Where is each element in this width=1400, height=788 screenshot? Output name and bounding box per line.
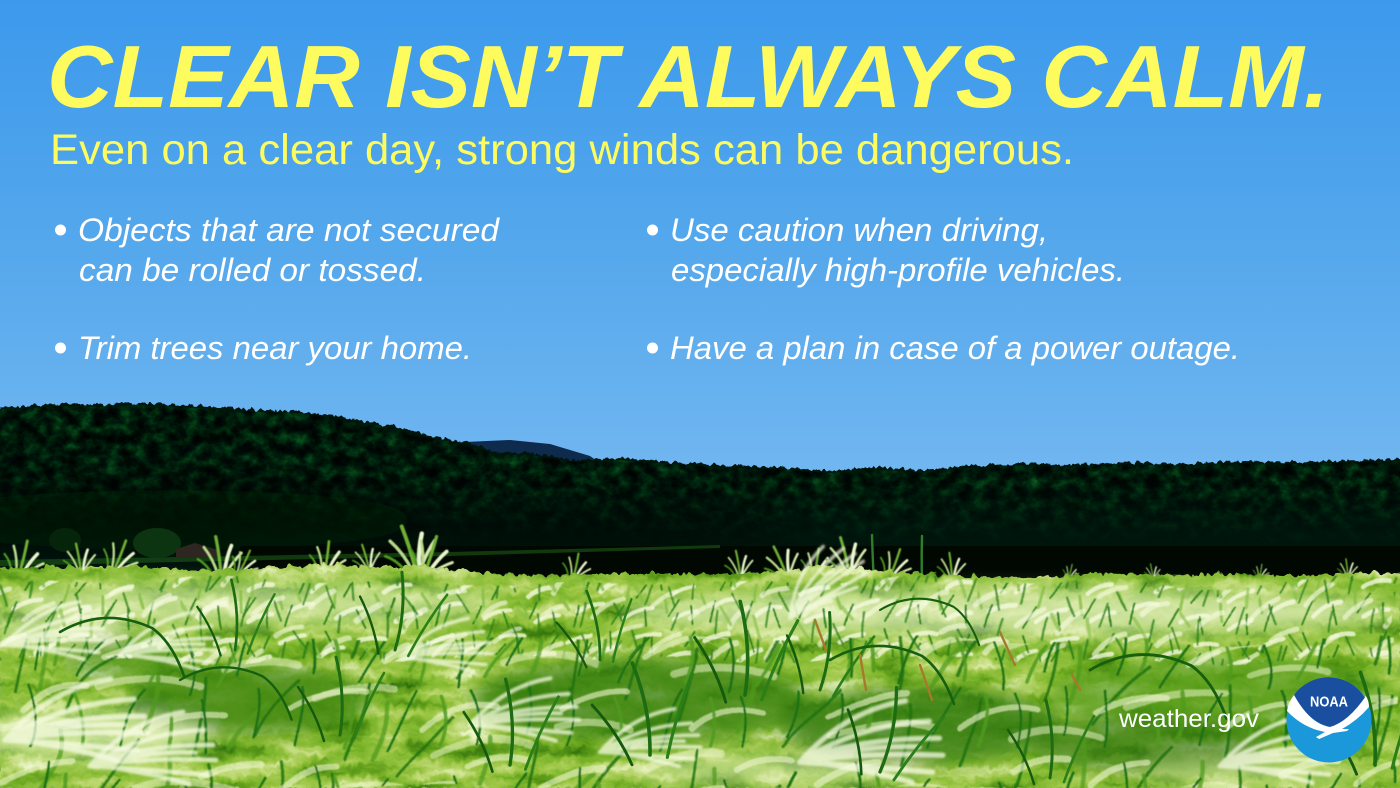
dark lower forest shadow — [0, 490, 800, 550]
wheat grass field — [0, 533, 1400, 788]
bullet: caution when driving: Use caution when driving, — [670, 212, 1048, 248]
bullet: caution when driving — [647, 212, 1125, 288]
weather.gov label: weather.gov — [1118, 705, 1260, 733]
bullet: power outage plan: Have a plan in case of a power outage. — [670, 330, 1240, 366]
dark grass blades — [60, 567, 1400, 788]
rust coloured stems — [815, 620, 1080, 700]
title: CLEAR ISN’T ALWAYS CALM. — [47, 27, 1329, 126]
light and shade in field — [0, 584, 1400, 784]
icon: NOAA logo — [1286, 677, 1372, 762]
dark lake band — [240, 546, 1400, 582]
bullet: objects not secured: Objects that are not secured — [78, 212, 500, 248]
bullet: objects not secured — [55, 212, 500, 288]
distant blue ridge — [465, 440, 610, 470]
background sky — [0, 0, 1400, 560]
bullet: objects not secured: can be rolled or tossed. — [79, 252, 426, 288]
grass tips above field edge — [1, 518, 1358, 582]
icon: NOAA logo: NOAA — [1310, 694, 1348, 710]
subtitle: Even on a clear day, strong winds can be dangerous. — [50, 126, 1074, 174]
bullet: caution when driving: especially high-profile vehicles. — [671, 252, 1125, 288]
shoreline with trees — [0, 528, 720, 566]
dense far grass texture — [0, 582, 1400, 660]
forested hills — [0, 400, 1400, 580]
dense near grass texture — [0, 640, 1400, 788]
soft feathery tufts — [5, 533, 1338, 784]
thin stalks above field — [872, 535, 923, 604]
bullet: trim trees: Trim trees near your home. — [78, 330, 472, 366]
